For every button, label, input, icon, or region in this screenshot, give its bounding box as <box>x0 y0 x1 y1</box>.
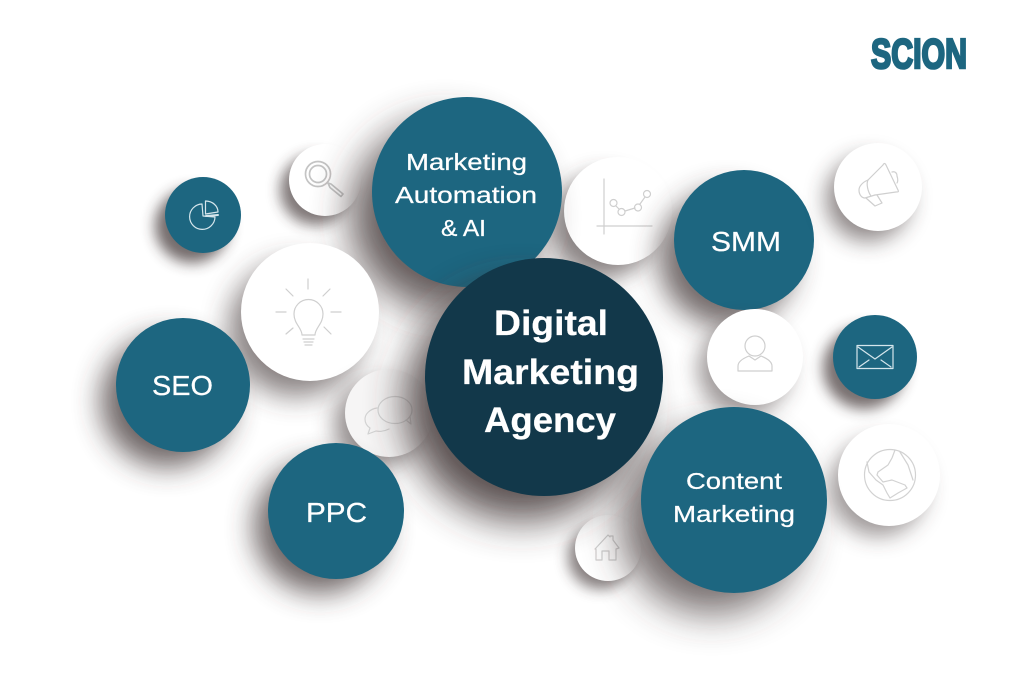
circle: globe icon <box>830 424 940 536</box>
shadow of PPC circle <box>254 461 386 593</box>
label: PPC: PPC <box>306 497 367 528</box>
circle: SMM <box>659 170 814 326</box>
circle: Marketing Automation & AI <box>351 97 562 310</box>
label: Digital Marketing Agency <box>462 304 639 440</box>
label: Digital Marketing Agency: Digital <box>494 304 608 343</box>
circle: home icon <box>568 515 641 589</box>
circle: Content Marketing <box>641 407 827 593</box>
circle: megaphone icon <box>826 143 922 241</box>
label: SMM: SMM <box>711 226 781 257</box>
icon: home <box>595 535 619 560</box>
circle: PPC <box>268 443 404 579</box>
label: Marketing Automation & AI: Automation <box>395 182 537 208</box>
label: Marketing Automation & AI: Marketing <box>406 149 527 175</box>
circle: search icon <box>280 144 361 225</box>
icon: line chart <box>597 179 652 234</box>
label: Marketing Automation & AI <box>395 149 537 241</box>
circle: Digital Marketing Agency <box>405 258 663 520</box>
label: SEO: SEO <box>152 370 213 401</box>
label: Digital Marketing Agency: Agency <box>484 401 617 440</box>
icon: magnifier <box>306 162 343 196</box>
circle: light bulb icon <box>229 243 379 396</box>
icon: user <box>738 336 772 371</box>
icon: chat bubbles <box>365 396 412 434</box>
label: Marketing Automation & AI: & AI <box>441 215 486 241</box>
circle: SEO <box>101 318 250 467</box>
label: Digital Marketing Agency: Marketing <box>462 353 639 392</box>
label: Content Marketing <box>673 468 795 527</box>
logo: SCION: SCION <box>871 30 967 77</box>
icon: envelope <box>857 346 893 368</box>
circle: chat icon <box>334 369 433 468</box>
circle: mail icon <box>823 315 917 409</box>
circle: user icon <box>698 309 803 415</box>
label: Content Marketing: Content <box>686 468 783 494</box>
shadow of content circle <box>621 431 803 613</box>
circle: pie chart icon <box>155 177 241 263</box>
icon: globe <box>864 450 916 500</box>
icon: megaphone <box>859 164 898 206</box>
icon: pie chart <box>190 201 218 229</box>
icon: light bulb <box>276 279 341 345</box>
label: Content Marketing: Marketing <box>673 501 795 527</box>
circle: chart icon <box>552 157 672 278</box>
